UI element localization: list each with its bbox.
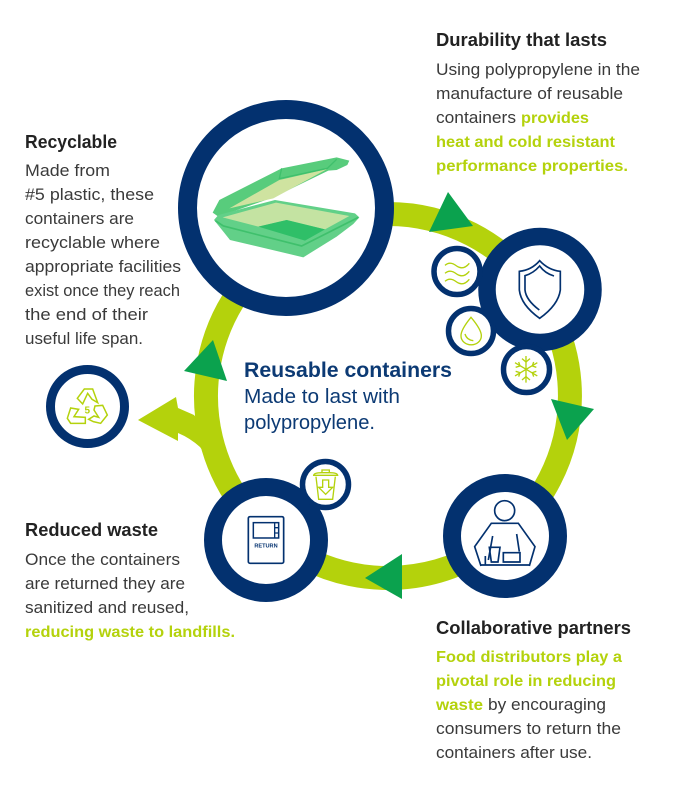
text block: recyclable: recyclable where — [25, 233, 160, 252]
text block: collaborative partners: containers after use. — [436, 743, 592, 762]
text block: reduced waste: sanitized and reused, — [25, 598, 189, 617]
heading: collaborative partners: Collaborative partners — [436, 618, 631, 638]
text block: reusable containers: polypropylene. — [244, 412, 375, 434]
text block: reduced waste: are returned they are — [25, 574, 185, 593]
icon: green food container — [213, 157, 359, 257]
text block: recyclable: the end of their — [25, 305, 148, 324]
text block: reduced waste: Once the containers — [25, 550, 180, 569]
icon: snowflake circle — [504, 346, 550, 392]
heading: recyclable: Recyclable — [25, 132, 117, 152]
cycle ring — [138, 214, 570, 578]
panel: shield circle — [487, 236, 593, 342]
arrow: bottom — [365, 554, 402, 599]
icon: shield — [519, 261, 560, 318]
text block: durability: Using polypropylene in the — [436, 60, 640, 79]
arrow: branch to recycling — [138, 397, 208, 458]
icon: trash circle — [302, 462, 348, 508]
text block: recyclable: exist once they reach — [25, 281, 180, 300]
text block: durability: performance properties. — [436, 158, 628, 175]
heading: reduced waste: Reduced waste — [25, 520, 158, 540]
icon: waves circle — [434, 248, 480, 294]
icon: recycling symbol 5: 5 — [85, 405, 91, 416]
text block: collaborative partners: pivotal role in reducing — [436, 673, 616, 690]
text block: reduced waste: reducing waste to landfills. — [25, 624, 235, 641]
text block: recyclable: #5 plastic, these — [25, 185, 154, 204]
text block: collaborative partners — [435, 618, 631, 762]
text block: recyclable: useful life span. — [25, 329, 143, 348]
text block: recyclable: Made from — [25, 161, 110, 180]
arrow: top — [429, 192, 473, 232]
text block: reusable containers — [244, 359, 452, 434]
icon: drop circle — [448, 308, 494, 354]
panel: person circle — [452, 483, 558, 589]
text block: collaborative partners: by encouraging — [488, 695, 606, 714]
panel: recycling circle — [50, 370, 124, 444]
text block: durability: heat and cold resistant — [436, 134, 616, 151]
icon: return machine: RETURN — [254, 544, 278, 550]
text block: recyclable: appropriate facilities — [25, 257, 181, 276]
arrow: right — [551, 399, 594, 440]
text block: recyclable: containers are — [25, 209, 134, 228]
text block: recyclable — [25, 132, 181, 348]
text block: durability: provides — [521, 110, 589, 127]
icon: person with tray — [475, 501, 535, 566]
text block: reduced waste — [25, 520, 235, 641]
text block: durability: manufacture of reusable — [436, 84, 623, 103]
panel: container circle — [188, 110, 384, 306]
heading: durability: Durability that lasts — [436, 30, 607, 50]
text block: collaborative partners: Food distributors play a — [436, 649, 622, 666]
text block: collaborative partners: consumers to return the — [436, 719, 621, 738]
text block: durability — [436, 30, 640, 175]
arrow: left — [184, 340, 227, 381]
text block: durability: containers — [436, 108, 516, 127]
text block: collaborative partners: waste — [435, 697, 483, 714]
text block: reusable containers: Made to last with — [244, 386, 400, 408]
heading: reusable containers: Reusable containers — [244, 359, 452, 382]
panel: return circle — [213, 487, 319, 593]
